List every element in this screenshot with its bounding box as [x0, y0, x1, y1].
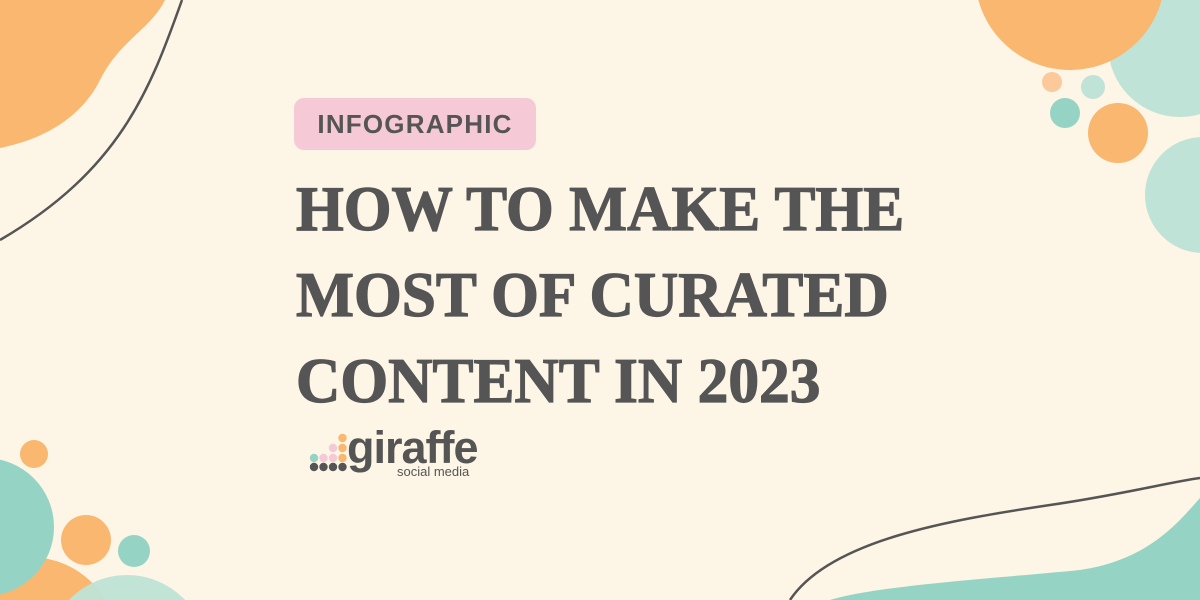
logo: giraffe social media: social media — [397, 464, 469, 479]
title: HOW TO MAKE THE — [296, 174, 904, 244]
circles: bottom-left — [0, 440, 207, 600]
title: CONTENT IN 2023 — [296, 346, 820, 416]
blob: bottom-right teal — [830, 498, 1200, 600]
circles: top-right — [975, 0, 1200, 253]
line: top-left curve — [0, 0, 182, 240]
tag: infographic — [294, 98, 536, 150]
icon: dots — [310, 434, 347, 472]
line: bottom-right curve — [790, 478, 1200, 600]
title — [296, 174, 904, 416]
title: MOST OF CURATED — [296, 260, 889, 330]
logo text: giraffe — [347, 422, 478, 473]
blob: top-left orange — [0, 0, 165, 148]
logo: giraffe social media — [310, 422, 478, 479]
tag: infographic: INFOGRAPHIC — [317, 109, 513, 139]
